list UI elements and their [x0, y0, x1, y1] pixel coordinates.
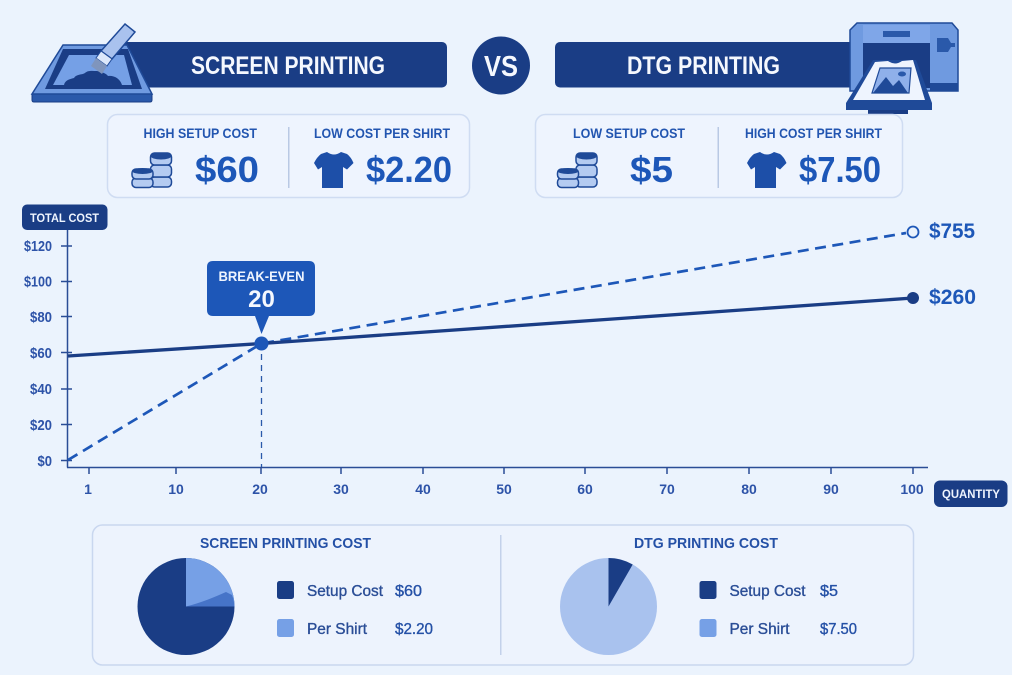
x axis labels: 30: [333, 481, 349, 497]
x axis labels: 70: [659, 481, 675, 497]
legend: DTG printing: Per Shirt: [730, 621, 790, 638]
x axis labels: 50: [496, 481, 512, 497]
y axis labels: [24, 239, 52, 470]
y axis: [61, 228, 72, 468]
x axis labels: 10: [168, 481, 184, 497]
y axis labels: $80: [30, 310, 52, 326]
divider: [288, 127, 290, 188]
endpoint: DTG: [908, 226, 918, 238]
y axis labels: $0: [38, 454, 52, 470]
icon: screen printing frame and squeegee: [32, 24, 152, 102]
legend: DTG printing: [700, 581, 857, 638]
x axis labels: [84, 481, 924, 497]
legend: DTG printing: $7.50: [820, 621, 857, 638]
VS badge: VS: [484, 51, 518, 83]
label: high cost per shirt: HIGH COST PER SHIRT: [745, 125, 882, 141]
y axis labels: $120: [24, 239, 52, 255]
icon: t-shirt: [747, 152, 786, 188]
line: screen printing (solid): [68, 298, 913, 356]
panel: DTG printing stats: [536, 114, 902, 198]
x axis labels: 1: [84, 481, 92, 497]
pie chart: DTG printing: [560, 558, 657, 655]
x axis labels: 60: [577, 481, 593, 497]
y axis labels: $40: [30, 382, 52, 398]
value: $260: $260: [929, 286, 976, 309]
value: $5: $5: [630, 149, 673, 190]
legend: DTG printing: Setup Cost: [730, 583, 806, 600]
legend: screen printing: Per Shirt: [307, 621, 368, 638]
icon: coins: [558, 152, 597, 188]
divider: [718, 127, 719, 188]
y axis labels: $60: [30, 346, 52, 362]
value: $60: $60: [195, 149, 259, 190]
panel: cost breakdown: [92, 525, 914, 665]
banner: screen printing: SCREEN PRINTING: [191, 52, 385, 80]
callout: break-even: 20: [248, 286, 275, 313]
value: $7.50: $7.50: [799, 149, 881, 190]
pie chart: screen printing: [138, 558, 234, 655]
label: low cost per shirt: LOW COST PER SHIRT: [314, 125, 450, 141]
legend: screen printing: Setup Cost: [307, 583, 384, 600]
y axis labels: $100: [24, 274, 52, 290]
banner: screen printing: [122, 42, 447, 88]
line chart: total cost by quantity: [22, 204, 1008, 507]
endpoint: screen: [907, 292, 919, 304]
icon: DTG printer: [846, 23, 958, 114]
x axis labels: 100: [900, 481, 924, 497]
icon: t-shirt: [314, 152, 354, 188]
value: $755: $755: [929, 220, 975, 243]
x axis labels: 40: [415, 481, 431, 497]
label: low setup cost: LOW SETUP COST: [573, 125, 685, 141]
heading: screen printing cost: SCREEN PRINTING COST: [200, 535, 371, 552]
panel: screen printing stats: [108, 114, 470, 198]
axis title: quantity: QUANTITY: [942, 487, 1000, 501]
banner: DTG printing: [555, 42, 865, 88]
banner: DTG printing: DTG PRINTING: [627, 52, 780, 80]
line: DTG printing (dashed): [68, 233, 906, 460]
axis title: quantity: [934, 480, 1008, 507]
x axis labels: 80: [741, 481, 757, 497]
legend: DTG printing: $5: [820, 583, 838, 600]
value: $2.20: $2.20: [366, 149, 452, 190]
x axis: [67, 467, 928, 474]
legend: screen printing: [277, 581, 433, 638]
legend: screen printing: $60: [395, 583, 422, 600]
break-even marker: [254, 336, 268, 350]
callout: break-even: [207, 261, 315, 334]
break-even drop line: [260, 343, 262, 467]
x axis labels: 90: [823, 481, 839, 497]
y axis labels: $20: [30, 418, 52, 434]
legend: screen printing: $2.20: [395, 621, 433, 638]
x axis labels: 20: [252, 481, 268, 497]
heading: DTG printing cost: DTG PRINTING COST: [634, 535, 778, 552]
icon: coins: [132, 152, 172, 188]
axis title: total cost: TOTAL COST: [30, 211, 100, 225]
VS badge: [472, 36, 530, 94]
callout: break-even: BREAK-EVEN: [218, 268, 304, 284]
label: high setup cost: HIGH SETUP COST: [144, 125, 257, 141]
axis title: total cost: [22, 204, 108, 230]
